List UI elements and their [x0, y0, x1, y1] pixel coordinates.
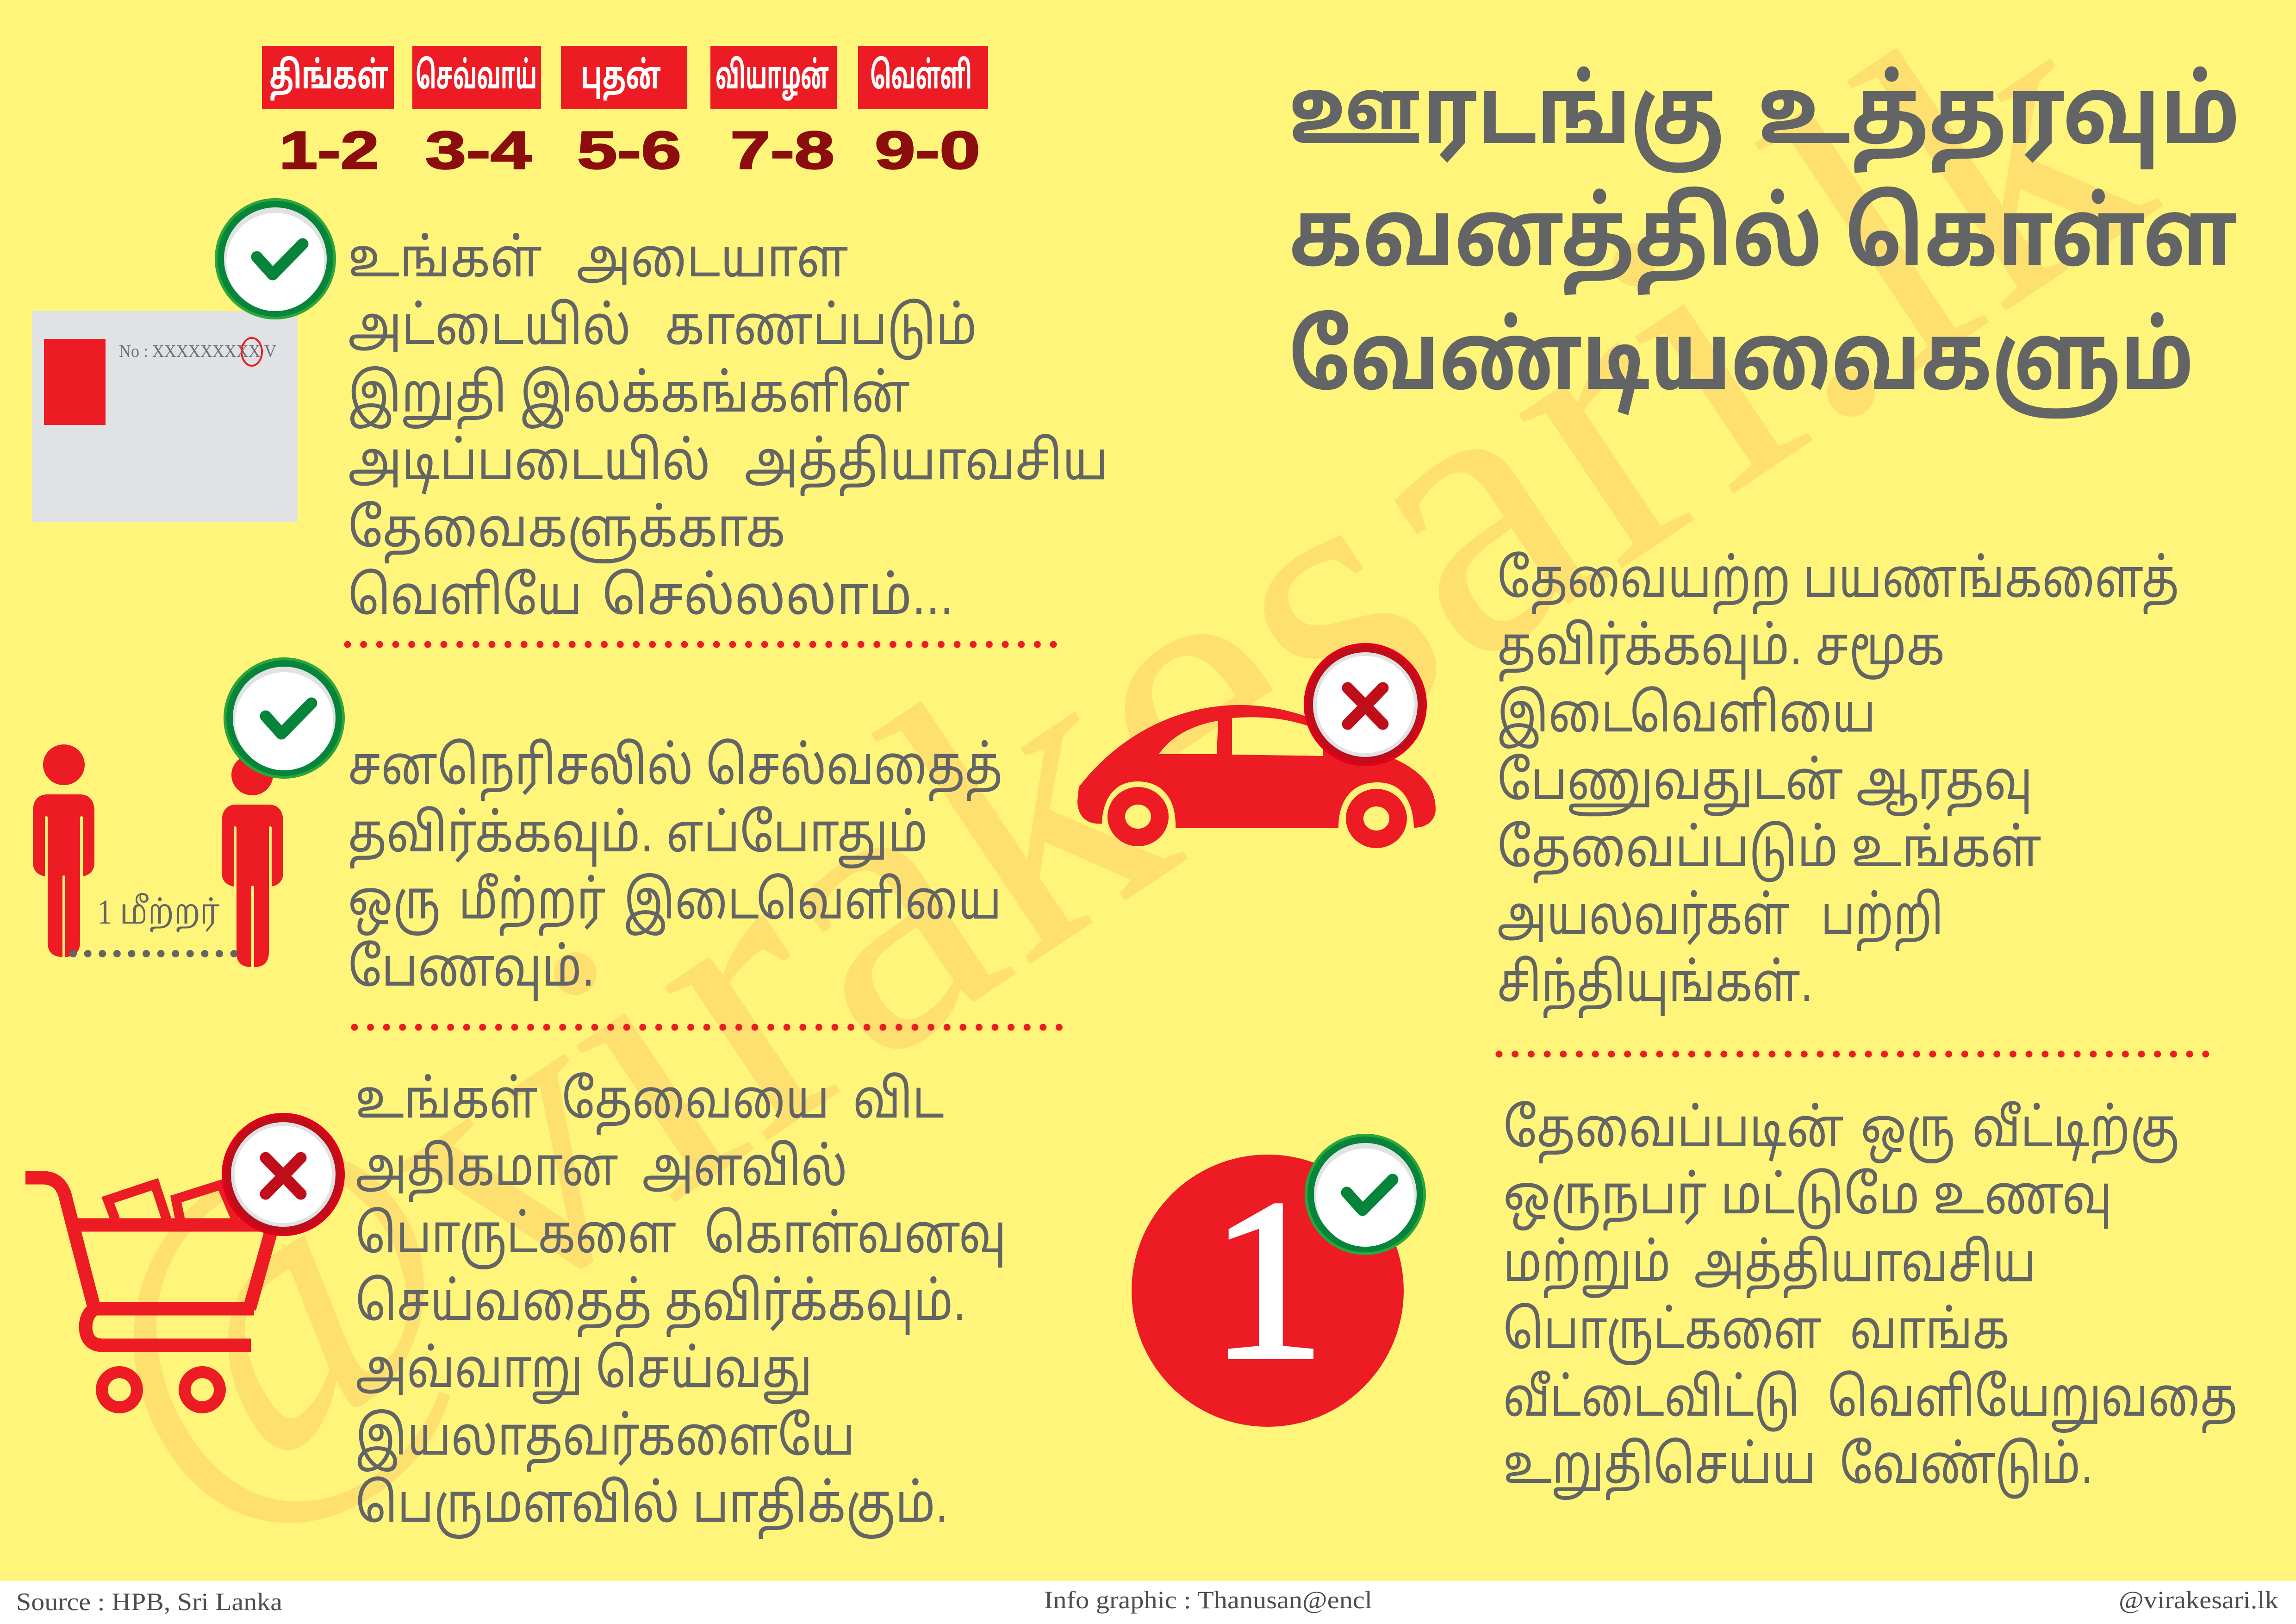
text block: avoid unnecessary travel: இடைவெளியை — [1497, 683, 1876, 749]
text block: ID digits rule: தேவைகளுக்காக — [348, 498, 785, 563]
text block: avoid crowds — [348, 735, 1002, 1001]
day box: Tuesday — [412, 46, 541, 109]
person right — [222, 755, 283, 967]
ID digits: Thursday: 7-8 — [730, 121, 834, 180]
text block: ID digits rule: செல்லலாம்... — [602, 565, 954, 625]
text block: one person per household: உறுதிசெய்ய வேண்டும். — [1503, 1434, 2093, 1500]
text block: one person per household: மற்றும் அத்தியாவசிய — [1503, 1232, 2036, 1298]
icon: shopping cart — [25, 1178, 270, 1407]
text block: avoid over-purchasing — [355, 1069, 1006, 1539]
text block: avoid crowds: சனநெரிசலில் செல்வதைத் — [348, 735, 1002, 801]
text block: one person per household: ஒருநபர் மட்டுமே உணவு — [1503, 1165, 2112, 1230]
text block: avoid unnecessary travel: பேணுவதுடன் ஆரதவு — [1497, 750, 2033, 816]
day box: Friday: வெள்ளி — [870, 55, 972, 97]
day box: Tuesday: செவ்வாய் — [416, 55, 537, 97]
text block: avoid over-purchasing: இயலாதவர்களையே — [355, 1406, 855, 1472]
icon: cross badge 2 — [1304, 643, 1427, 766]
day box: Wednesday — [561, 46, 687, 109]
publisher handle: @virakesari.lk — [2119, 1586, 2278, 1614]
day box: Monday: திங்கள் — [269, 55, 388, 100]
icon: check badge 3 — [1305, 1134, 1426, 1255]
text block: avoid over-purchasing: பொருட்களை கொள்வனவு — [355, 1204, 1006, 1269]
icon: car — [1077, 705, 1436, 839]
text block: avoid crowds: பேணவும். — [348, 937, 595, 1001]
text block: ID digits rule: வெளியே — [348, 565, 582, 625]
text block: avoid over-purchasing: செய்வதைத் தவிர்க்கவும். — [355, 1271, 966, 1337]
icon: one person circle — [1132, 1153, 1404, 1427]
text block: avoid unnecessary travel: தவிர்க்கவும். சமூக — [1497, 616, 1945, 681]
text block: avoid over-purchasing: அவ்வாறு செய்வது — [355, 1338, 812, 1404]
distance dots — [73, 950, 234, 957]
text block: avoid over-purchasing: அதிகமான அளவில் — [355, 1137, 847, 1202]
text block: one person per household — [1503, 1098, 2237, 1500]
text block: avoid crowds: ஒரு மீற்றர் இடைவெளியை — [348, 870, 1002, 936]
graphic credit: Info graphic : Thanusan@encl — [1044, 1586, 1372, 1614]
text block: ID digits rule: உங்கள் அடையாள — [348, 228, 848, 288]
day box: Thursday: வியாழன் — [716, 55, 829, 100]
text block: one person per household: தேவைப்படின் ஒரு வீட்டிற்கு — [1503, 1098, 2179, 1163]
text block: avoid unnecessary travel — [1497, 548, 2179, 1018]
ID digits: Tuesday: 3-4 — [425, 121, 531, 180]
text block: avoid over-purchasing: உங்கள் தேவையை விட — [355, 1069, 944, 1135]
icon: ID card: No : XXXXXXXXX V — [119, 342, 277, 361]
ID digits: Wednesday: 5-6 — [577, 121, 681, 180]
text block: one person per household: பொருட்களை வாங்க — [1503, 1299, 2010, 1365]
text block: avoid over-purchasing: பெருமளவில் பாதிக்கும். — [355, 1473, 948, 1539]
footer — [0, 1581, 2296, 1624]
text block: avoid unnecessary travel: அயலவர்கள் பற்றி — [1497, 885, 1943, 951]
day box: Monday — [262, 46, 394, 109]
text block: ID digits rule: அட்டையில் காணப்படும் — [348, 295, 977, 360]
text block: ID digits rule — [348, 228, 1108, 625]
ID digits: Monday: 1-2 — [279, 121, 379, 180]
day box: Wednesday: புதன் — [581, 55, 661, 100]
day box: Friday — [858, 46, 988, 109]
icon: ID card — [32, 311, 298, 522]
text block: avoid unnecessary travel: தேவைப்படும் உங்கள் — [1497, 818, 2041, 883]
icon: two people one metre apart — [33, 744, 283, 967]
day box: Thursday — [710, 46, 837, 109]
title: ஊரடங்கு — [1289, 60, 1724, 173]
title — [1289, 60, 2240, 418]
title: உத்தரவும் — [1758, 60, 2240, 173]
text block: ID digits rule: இறுதி இலக்கங்களின் — [348, 363, 910, 429]
icon: one person circle: 1 — [1210, 1153, 1325, 1407]
icon: cross badge 1 — [222, 1113, 345, 1236]
person left — [33, 744, 94, 957]
text block: avoid unnecessary travel: சிந்தியுங்கள். — [1497, 952, 1813, 1018]
distance label: 1 மீற்றர் — [97, 893, 220, 932]
icon: check badge 1 — [215, 198, 336, 319]
text block: ID digits rule: அடிப்படையில் அத்தியாவசிய — [348, 431, 1108, 496]
icon: check badge 2 — [224, 657, 345, 779]
ID digits: Friday: 9-0 — [875, 121, 980, 180]
text block: avoid crowds: தவிர்க்கவும். எப்போதும் — [348, 803, 928, 868]
text block: avoid unnecessary travel: தேவையற்ற பயணங்களைத் — [1497, 548, 2179, 614]
source credit: Source : HPB, Sri Lanka — [16, 1588, 282, 1616]
day schedule — [262, 46, 988, 180]
